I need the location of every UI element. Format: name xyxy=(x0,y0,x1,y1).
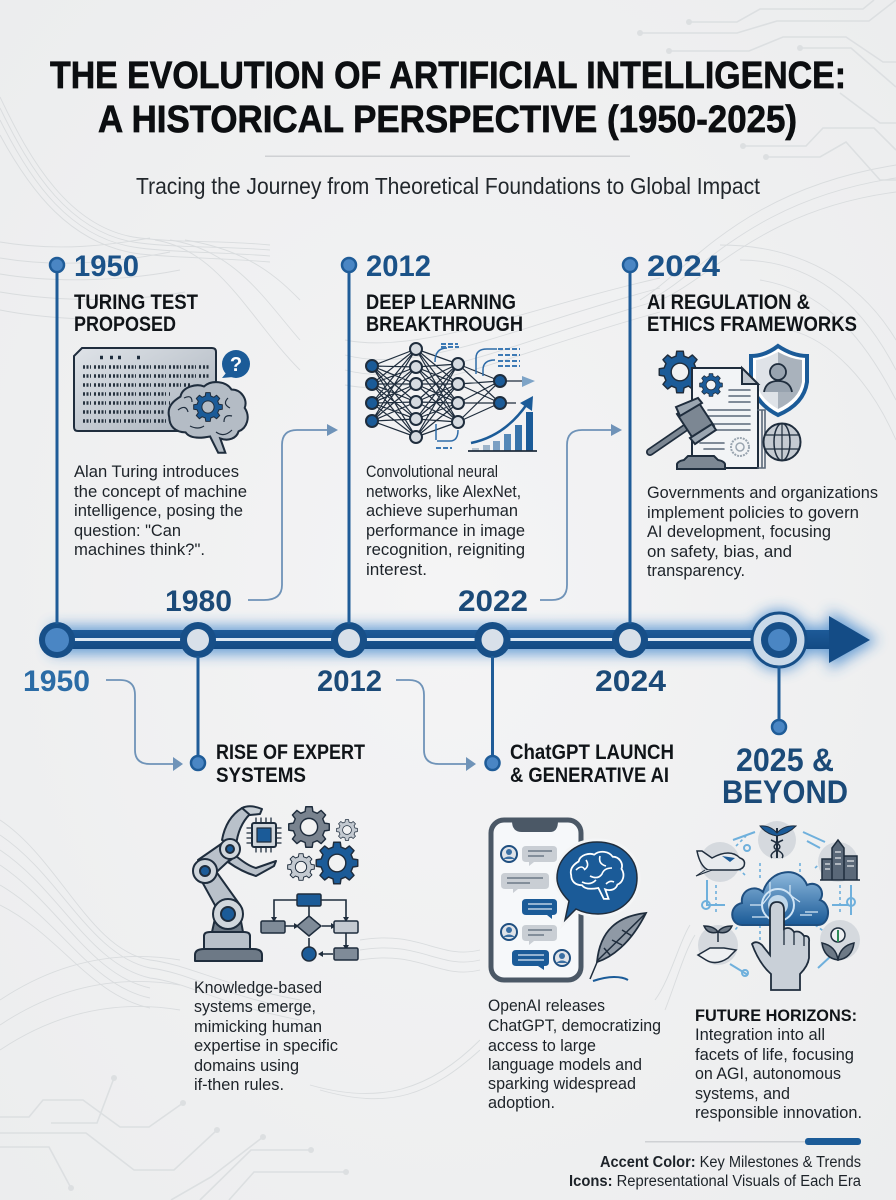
gavel xyxy=(650,398,725,469)
panel: 2012 Deep Learning xyxy=(366,250,537,579)
year 2024: 2024 xyxy=(647,250,720,283)
arrow: 2012 to 2022 xyxy=(396,680,476,771)
body text: responsible innovation. xyxy=(695,1103,862,1122)
timeline glow xyxy=(50,610,878,670)
body text xyxy=(695,1006,862,1122)
node 1950 xyxy=(39,622,75,658)
body text: on AGI, autonomous xyxy=(695,1064,841,1083)
leaf circle xyxy=(820,920,860,960)
date labels along timeline: 2024 xyxy=(595,665,666,698)
node 1980 xyxy=(180,622,216,658)
body text: systems emerge, xyxy=(194,997,316,1016)
node 2024 xyxy=(612,622,648,658)
arrow: 1950 to 1980 xyxy=(106,680,183,771)
hand xyxy=(752,902,809,990)
heading: ChatGPT: ChatGPT LAUNCH xyxy=(510,741,674,764)
body text: performance in image xyxy=(366,521,525,540)
date labels along timeline: 2012 xyxy=(317,665,382,698)
heading: ChatGPT: & GENERATIVE AI xyxy=(510,764,669,787)
globe xyxy=(764,424,800,460)
body text xyxy=(488,996,661,1112)
heading: AI Regulation: AI REGULATION & xyxy=(647,291,810,314)
body text: question: "Can xyxy=(74,521,181,540)
heading: 2025 and Beyond: 2025 & xyxy=(736,742,834,778)
heading: 2025 and Beyond: BEYOND xyxy=(722,774,848,810)
body text: mimicking human xyxy=(194,1017,322,1036)
body text: on safety, bias, and xyxy=(647,542,792,561)
orbit connectors xyxy=(702,832,855,976)
body text: FUTURE HORIZONS: xyxy=(695,1006,857,1025)
node 2025 xyxy=(752,613,806,667)
shield xyxy=(751,346,807,415)
city circle xyxy=(818,840,860,882)
heading: Expert Systems: SYSTEMS xyxy=(216,764,306,787)
body text: OpenAI releases xyxy=(488,996,605,1015)
year 1950: 1950 xyxy=(74,250,139,283)
panel: 1950 Turing Test xyxy=(74,250,250,559)
body text: implement policies to govern xyxy=(647,503,859,522)
icon: future horizons xyxy=(696,821,860,990)
body text: language models and xyxy=(488,1055,642,1074)
date labels along timeline: 2022 xyxy=(458,585,528,618)
body text: recognition, reigniting xyxy=(366,540,525,559)
heading: Deep Learning xyxy=(366,291,523,336)
legend rule xyxy=(645,1138,861,1145)
legend text: Icons: Representational Visuals of Each Era xyxy=(569,1173,861,1190)
body text: Convolutional neural xyxy=(366,462,498,481)
date labels along timeline: 1950 xyxy=(23,665,90,698)
body text: transparency. xyxy=(647,561,745,580)
medical circle xyxy=(758,821,796,859)
body text: expertise in specific xyxy=(194,1036,338,1055)
icon: neural network xyxy=(366,343,537,451)
body text: adoption. xyxy=(488,1093,555,1112)
body text xyxy=(194,978,338,1094)
year 2012: 2012 xyxy=(366,250,431,283)
heading: Turing Test: TURING TEST xyxy=(74,291,198,314)
body text: sparking widespread xyxy=(488,1074,636,1093)
body text: intelligence, posing the xyxy=(74,501,243,520)
date labels along timeline: 1980 xyxy=(165,585,232,618)
icon: flowchart xyxy=(261,894,358,961)
heading: Turing Test: PROPOSED xyxy=(74,313,176,336)
icon: robot arm xyxy=(193,806,281,961)
panel: 2022 ChatGPT xyxy=(488,741,674,1112)
node 2022 xyxy=(474,622,510,658)
icon: gears xyxy=(288,807,358,884)
icon: punch card xyxy=(74,348,216,431)
legend text xyxy=(569,1154,861,1190)
date labels along timeline xyxy=(23,585,666,698)
icon: question bubble: ? xyxy=(230,354,242,376)
body text: Governments and organizations xyxy=(647,483,878,502)
heading: AI Regulation xyxy=(647,291,857,336)
car circle xyxy=(696,842,744,882)
icon: brain speech bubble xyxy=(556,841,638,922)
heading: Turing Test xyxy=(74,291,198,336)
body text: AI development, focusing xyxy=(647,522,831,541)
cloud xyxy=(732,872,828,925)
main timeline xyxy=(39,610,878,670)
heading: 2025 and Beyond xyxy=(722,742,848,810)
heading: AI Regulation: ETHICS FRAMEWORKS xyxy=(647,313,857,336)
body text: machines think?". xyxy=(74,540,205,559)
heading: Expert Systems xyxy=(216,741,365,787)
panel: 2024 AI Regulation xyxy=(647,250,878,580)
body text: Alan Turing introduces xyxy=(74,462,239,481)
heading: ChatGPT xyxy=(510,741,674,787)
body text: ChatGPT, democratizing xyxy=(488,1016,661,1035)
body text: if-then rules. xyxy=(194,1075,284,1094)
body text: systems, and xyxy=(695,1084,790,1103)
body text: Knowledge-based xyxy=(194,978,322,997)
body text: achieve superhuman xyxy=(366,501,518,520)
document xyxy=(692,368,765,468)
heading: Deep Learning: BREAKTHROUGH xyxy=(366,313,523,336)
stems and markers xyxy=(50,258,786,770)
timeline arrowhead xyxy=(829,616,870,663)
timeline inner line xyxy=(70,638,775,641)
icon: regulation collage xyxy=(650,346,807,469)
heading: Deep Learning: DEEP LEARNING xyxy=(366,291,516,314)
legend xyxy=(569,1138,861,1190)
title xyxy=(50,55,846,141)
subtitle: Tracing the Journey from Theoretical Foundations to Global Impact xyxy=(136,173,761,199)
icon: feather xyxy=(590,913,646,981)
body text: interest. xyxy=(366,560,427,579)
body text: access to large xyxy=(488,1036,596,1055)
title: A HISTORICAL PERSPECTIVE (1950-2025) xyxy=(98,99,797,141)
icon: phone with chat xyxy=(491,820,581,980)
node 2012 xyxy=(331,622,367,658)
body text: the concept of machine xyxy=(74,482,247,501)
body text: facets of life, focusing xyxy=(695,1045,854,1064)
body text: domains using xyxy=(194,1056,299,1075)
body text xyxy=(74,462,247,559)
arrow: 1980 to 2012 xyxy=(248,424,338,600)
title divider xyxy=(265,156,630,157)
plant in hand circle xyxy=(698,925,738,965)
timeline bar xyxy=(58,630,838,649)
body text: networks, like AlexNet, xyxy=(366,482,521,501)
body text: Integration into all xyxy=(695,1025,825,1044)
body text xyxy=(366,462,525,579)
legend text: Accent Color: Key Milestones & Trends xyxy=(600,1154,861,1171)
panel: 1980 Expert Systems xyxy=(193,741,365,1094)
icon: question bubble xyxy=(222,350,250,378)
icon: brain with gear xyxy=(169,382,248,453)
arrow: 2022 to 2024 xyxy=(540,424,622,600)
heading: Expert Systems: RISE OF EXPERT xyxy=(216,741,365,764)
mini bar chart xyxy=(468,396,537,451)
body text xyxy=(647,483,878,580)
panel: 2025 and beyond xyxy=(695,742,862,1122)
